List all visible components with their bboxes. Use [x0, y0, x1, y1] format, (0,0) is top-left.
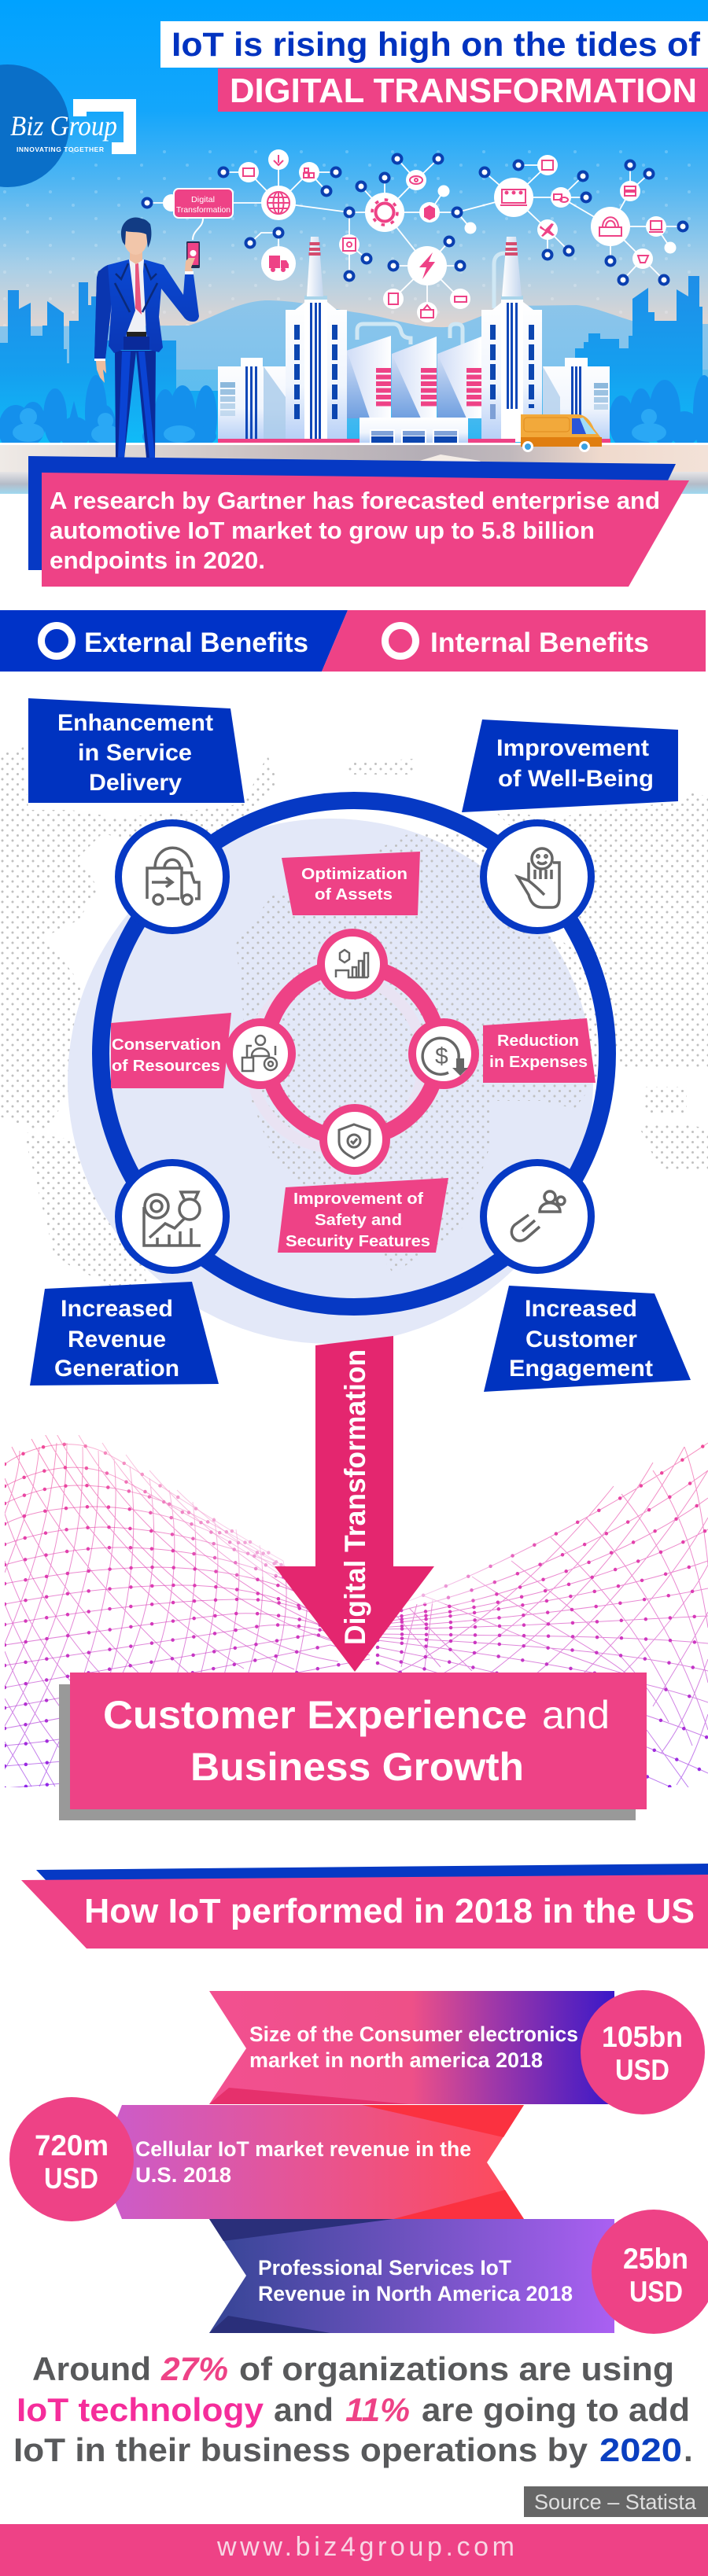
label: conservation of resources: of Resources: [112, 1057, 220, 1075]
label: improvement of well-being: [462, 719, 678, 812]
icon: plane: [540, 223, 555, 237]
closing statement: are going to add: [422, 2391, 690, 2428]
skyline right: [575, 276, 702, 443]
footer: www.biz4group.com: [216, 2532, 514, 2562]
corner circles: [118, 822, 592, 1271]
closing statement: 11%: [345, 2391, 410, 2428]
label: conservation of resources: Conservation: [112, 1036, 221, 1054]
dotted world map background: [0, 747, 708, 1305]
white nodes: [238, 149, 677, 322]
inner circles: [229, 933, 475, 1171]
light disc: [68, 819, 593, 1344]
footer: [0, 2524, 708, 2576]
icon: asset chart: [336, 950, 368, 977]
icon: gear: [376, 203, 393, 222]
closing statement: and: [274, 2391, 334, 2428]
outcome box: customer experience and business growth: Customer Experience: [103, 1693, 527, 1737]
label: increased customer engagement: Engagement: [509, 1356, 653, 1382]
tie: [135, 263, 142, 315]
label: increased revenue generation: Generation: [54, 1356, 179, 1382]
closing statement: [13, 2350, 693, 2468]
section heading: how IoT performed: How IoT performed in 2018 in the US: [84, 1892, 695, 1930]
title: IoT is rising high on the tides of: [171, 26, 701, 64]
logo: [0, 64, 136, 187]
pink base strip: [218, 439, 610, 443]
icon: lightning: [419, 252, 435, 279]
label: enhancement in service delivery: in Service: [78, 740, 192, 766]
stat bar: cellular IoT: [9, 2097, 524, 2221]
icon: delivery truck and gear: [147, 848, 199, 904]
research callout: automotive IoT market to grow up to 5.8 billion: [50, 517, 595, 544]
left small building: [218, 358, 286, 442]
label: improvement of well-being: of Well-Being: [498, 766, 654, 792]
connectors: [147, 159, 683, 312]
label: optimization of assets: [282, 852, 420, 915]
stat bar: consumer electronics: Size of the Consumer electronics: [249, 2022, 578, 2046]
stat bar: professional services: USD: [629, 2276, 683, 2308]
callout: digital transformation bubble: [163, 189, 233, 240]
mesh wave background: [0, 1427, 708, 1797]
pipes: [271, 253, 505, 432]
icon: security shield: [339, 1124, 370, 1158]
label: reduction in expenses: Reduction: [497, 1032, 579, 1050]
stat bar: cellular IoT: U.S. 2018: [135, 2163, 231, 2187]
closing statement: IoT in their business operations by: [13, 2431, 588, 2468]
label: improvement of well-being: Improvement: [496, 735, 649, 761]
outcome box: customer experience and business growth: [59, 1673, 647, 1820]
label: optimization of assets: of Assets: [315, 885, 393, 903]
hero illustration background: [0, 0, 708, 494]
left hand: [96, 361, 106, 383]
outcome box: customer experience and business growth: Business Growth: [190, 1745, 524, 1789]
left tower: [286, 302, 347, 442]
label: increased customer engagement: Increased: [525, 1296, 637, 1322]
icon: package: [424, 205, 435, 220]
right small building: [543, 358, 610, 442]
left cuff: [94, 358, 105, 361]
callout: digital transformation bubble: Digital: [191, 195, 215, 204]
closing statement: Around: [32, 2350, 151, 2387]
stat bar: professional services: [209, 2210, 708, 2334]
inner ring shadow: [250, 975, 423, 1148]
hair: [121, 218, 151, 248]
stat bar: consumer electronics: USD: [615, 2054, 669, 2086]
label: reduction in expenses: in Expenses: [489, 1053, 588, 1071]
stat bar: professional services: Revenue in North America 2018: [258, 2282, 573, 2306]
factory complex: [218, 237, 610, 452]
skyline left: [0, 282, 218, 444]
label: improvement of safety and security features: [278, 1178, 448, 1253]
research callout: endpoints in 2020.: [50, 546, 265, 574]
stat bar: professional services: Professional Services IoT: [258, 2256, 511, 2280]
right tower: [481, 302, 542, 442]
stat bar: cellular IoT: USD: [44, 2162, 98, 2195]
icon: magnet attracting people: [511, 1191, 565, 1241]
closing statement: .: [684, 2431, 693, 2468]
section heading: how IoT performed: [21, 1864, 708, 1949]
source tag: [524, 2486, 708, 2517]
arrow: digital transformation: [275, 1336, 434, 1672]
research callout: [28, 456, 689, 587]
label: enhancement in service delivery: [28, 698, 245, 803]
trees: [0, 375, 708, 443]
label: improvement of safety and security features: Safety and: [315, 1211, 402, 1229]
logo: INNOVATING TOGETHER: [17, 145, 104, 153]
label: enhancement in service delivery: Delivery: [89, 770, 182, 796]
stat bar: consumer electronics: 105bn: [602, 2021, 683, 2053]
network diagram: [143, 149, 688, 322]
closing statement: 27%: [160, 2350, 228, 2387]
jacket: [94, 259, 199, 359]
icon: truck: [269, 256, 289, 268]
closing statement: of organizations are using: [239, 2350, 674, 2387]
label: increased customer engagement: Customer: [525, 1327, 637, 1352]
legs: [115, 351, 156, 458]
ring nodes: [143, 154, 688, 285]
label: improvement of safety and security features: Security Features: [286, 1232, 430, 1250]
closing statement: IoT technology: [17, 2391, 264, 2428]
saw-tooth sheds: [346, 336, 391, 418]
icon: hand with smiley: [518, 848, 559, 907]
label: increased revenue generation: [30, 1282, 219, 1386]
legend tabs: Internal Benefits: [430, 627, 649, 658]
shirt: [127, 259, 146, 332]
legend tabs: External Benefits: [84, 627, 308, 658]
icon: dollar reduction: $: [435, 1043, 448, 1069]
icon: dollar reduction: [422, 1038, 468, 1076]
callout: digital transformation bubble: Transformation: [176, 205, 230, 215]
icon: revenue growth: [144, 1192, 201, 1246]
label: conservation of resources: [111, 1013, 231, 1088]
research callout: A research by Gartner has forecasted enterprise and: [50, 487, 660, 514]
front low building: [360, 418, 468, 443]
label: increased revenue generation: Increased: [61, 1296, 173, 1322]
title: [160, 21, 708, 112]
label: enhancement in service delivery: Enhancement: [57, 710, 213, 736]
logo: Biz Group: [10, 110, 117, 142]
businessman figure: [94, 218, 200, 458]
road: [0, 443, 708, 445]
outer ring: [101, 800, 607, 1307]
raised hand and phone: [185, 241, 200, 274]
belt: [127, 332, 146, 337]
inner dotted map: [236, 834, 599, 1274]
outcome box: customer experience and business growth: and: [542, 1693, 610, 1737]
benefits wheel: [101, 800, 607, 1307]
label: optimization of assets: Optimization: [301, 865, 407, 883]
stat bar: professional services: 25bn: [623, 2243, 688, 2275]
icon: resources person and gear: [242, 1036, 277, 1071]
stat bar: cellular IoT: Cellular IoT market revenue in the: [135, 2137, 471, 2161]
label: reduction in expenses: [483, 1018, 596, 1083]
closing statement: 2020: [599, 2431, 682, 2468]
inner ring: [266, 966, 439, 1139]
title: DIGITAL TRANSFORMATION: [230, 72, 697, 110]
trousers waist: [124, 337, 149, 350]
stat bar: consumer electronics: [209, 1990, 705, 2114]
label: improvement of safety and security features: Improvement of: [293, 1190, 423, 1208]
legend tabs: [0, 610, 706, 672]
delivery van: [521, 414, 602, 452]
label: increased customer engagement: [484, 1286, 691, 1392]
arrow: digital transformation: Digital Transformation: [339, 1349, 371, 1645]
label: increased revenue generation: Revenue: [68, 1327, 166, 1352]
neck and face: [130, 250, 142, 264]
source tag: Source – Statista: [534, 2490, 697, 2514]
stat bar: consumer electronics: market in north america 2018: [249, 2048, 543, 2072]
node icons: [243, 155, 663, 318]
stat bar: cellular IoT: 720m: [35, 2129, 109, 2162]
